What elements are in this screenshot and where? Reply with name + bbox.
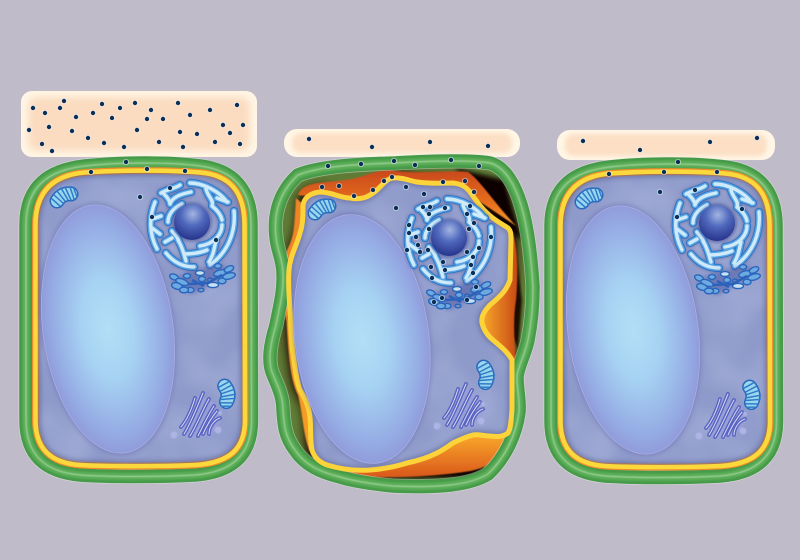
mitochondrion upper: [577, 188, 602, 207]
panel: middle plasmolysed cell: [270, 129, 533, 487]
mitochondrion upper: [52, 187, 77, 206]
mitochondrion lower: [738, 381, 765, 411]
nucleus with endoplasmic reticulum: [151, 183, 236, 294]
cell wall: [551, 164, 776, 478]
vacuole: [550, 195, 716, 465]
mitochondrion lower: [213, 380, 240, 410]
mitochondrion upper: [310, 199, 335, 218]
block: dense agar block: [21, 91, 257, 157]
golgi: [434, 384, 485, 430]
cytoplasm with yellow membrane: [285, 170, 520, 475]
membrane and cytoplasm: [555, 166, 775, 471]
cell body: [550, 164, 776, 478]
particles: [29, 101, 243, 240]
gap between wall and protoplast: [270, 161, 533, 487]
cell wall: [26, 163, 252, 476]
golgi: [170, 393, 222, 438]
orange shrunken membrane folds: [284, 170, 517, 477]
golgi: [696, 394, 747, 440]
nucleus with endoplasmic reticulum: [676, 184, 761, 295]
particles: [583, 138, 757, 217]
cell wall: [270, 161, 533, 487]
block: sparse agar block: [557, 130, 775, 160]
panel: left cell with many dots in block: [21, 91, 257, 476]
vacuole: [279, 205, 445, 473]
particles: [309, 139, 491, 302]
block: sparse agar block: [284, 129, 520, 157]
membrane and cytoplasm: [30, 165, 250, 470]
vacuole: [25, 194, 191, 464]
panel: right cell: [550, 130, 776, 478]
mitochondrion lower: [472, 361, 499, 391]
nucleus with endoplasmic reticulum: [408, 199, 493, 310]
